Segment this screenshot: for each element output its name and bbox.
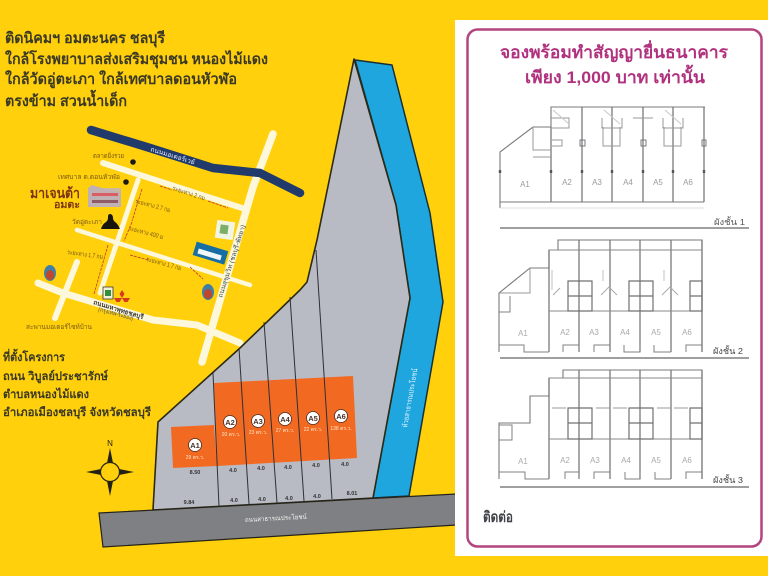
panel: project land: [153, 59, 410, 510]
lot markers: 27 ตร.ว.: [276, 428, 294, 434]
heading: location highlights: ใกล้วัดอู่ตะเภา ใกล้เทศบาลดอนหัวฬ่อ: [5, 70, 237, 89]
floor plan 3: A5: [651, 456, 661, 465]
lot dimensions: 4.0: [312, 463, 320, 469]
lot markers: A4: [280, 415, 291, 424]
floor plan 2: A2: [560, 328, 570, 337]
public road: [99, 494, 456, 547]
floor plan 2: A6: [682, 328, 692, 337]
panel: canal: [355, 60, 443, 498]
floor plan 1 label: ผังชั้น 1: [714, 216, 745, 227]
address text block: ที่ตั้งโครงการ: [3, 348, 66, 364]
map place labels: เทศบาล ต.ดอนหัวฬ่อ: [58, 173, 120, 181]
floor plan 1: A2: [562, 178, 572, 187]
floor plan 1: A1: [520, 180, 530, 189]
lot dimensions: 4.0: [257, 466, 265, 472]
floor plan 3: A1: [518, 457, 528, 466]
heading: location highlights: ใกล้โรงพยาบาลส่งเสริมชุมชน หนองไม้แดง: [5, 49, 268, 69]
floor plan 3: A3: [590, 456, 600, 465]
lot dimensions: 4.0: [229, 468, 237, 474]
panel border: [468, 30, 762, 546]
lot dimensions: 4.0: [313, 494, 321, 500]
map place labels: ระยะทาง 2 กม: [171, 185, 206, 202]
floor plan 2: A4: [620, 328, 630, 337]
lot markers: 23 ตร.ว.: [249, 430, 267, 436]
distance arrows: [94, 186, 228, 294]
lot markers: A5: [308, 414, 318, 423]
icon: blue shop sign: [193, 242, 228, 265]
canal label: ห้วยสาธารณประโยชน์: [400, 368, 419, 428]
logo: Magenta Amata: [30, 185, 80, 211]
floor plan 1: A3: [592, 178, 602, 187]
heading: location highlights: ตรงข้าม สวนน้ำเด็ก: [5, 89, 127, 110]
floor plan 3: A2: [560, 456, 570, 465]
highway label: ถนนมอเตอร์เวย์: [149, 145, 196, 166]
road label: ถนนสาธารณประโยชน์: [245, 513, 308, 524]
map place labels: ระยะทาง 2.7 กม: [134, 198, 171, 214]
lot dimensions: 9.84: [184, 500, 195, 506]
floor plan 2: A5: [651, 328, 661, 337]
logo: Magenta Amata: อมตะ: [54, 200, 80, 211]
address text block: ตำบลหนองไม้แดง: [3, 387, 89, 401]
heading: location highlights: [5, 29, 268, 110]
contact label: ติดต่อ: [483, 508, 513, 526]
lot markers: 20 ตร.ว.: [222, 432, 240, 438]
floor plan 1: A6: [683, 178, 693, 187]
floor plan 2: [499, 240, 702, 352]
lot dimensions: 8.50: [190, 470, 200, 476]
map place labels: ถนนมหาพุทธชลบุรี: [92, 298, 145, 321]
orange units A2 to A6: [214, 376, 357, 466]
location map: [26, 130, 300, 362]
lot dimensions: 4.0: [258, 497, 266, 503]
lot dimensions: 8.01: [347, 491, 357, 497]
lot markers: A2: [225, 418, 235, 427]
icon: Mitsubishi: [114, 290, 130, 302]
floor plan 2 label: ผังชั้น 2: [713, 345, 743, 356]
lot dimensions: 4.0: [341, 462, 349, 468]
icon: residence logo: [215, 220, 235, 240]
lot markers: 138 ตร.ว.: [330, 426, 352, 432]
floor plan 1: A5: [653, 178, 663, 187]
icon: temple left: [44, 265, 56, 281]
lot dimensions: 4.0: [284, 465, 292, 471]
lot markers: 22 ตร.ว.: [304, 427, 322, 433]
icon: building: [88, 185, 121, 207]
lot markers: A1: [190, 441, 200, 450]
panel: floor plans: [455, 20, 768, 556]
icon: compass: [86, 439, 134, 496]
logo: Magenta Amata: มาเจนต้า: [30, 185, 80, 201]
lot dimensions: [184, 462, 357, 506]
lot markers: 29 ตร.ว.: [186, 455, 204, 461]
floor plan 3 label: ผังชั้น 3: [713, 474, 743, 485]
floor plan 3: A6: [682, 456, 692, 465]
lot dimensions: 4.0: [285, 496, 293, 502]
icon: Buddha: [101, 214, 120, 229]
icon: temple right: [202, 284, 214, 300]
map place labels: ถนนสุขุมวิท (ชลบุรี-พัทยา): [216, 224, 247, 299]
white local roads: [38, 134, 273, 362]
white panel background: [455, 20, 768, 556]
floor plan 3: A4: [621, 456, 631, 465]
heading: location highlights: ติดนิคมฯ อมตะนคร ชลบุรี: [5, 29, 166, 48]
land parcel: [153, 59, 410, 510]
lot dimensions: 4.0: [230, 498, 238, 504]
highway road: [91, 130, 300, 193]
floor plan 1: [500, 107, 706, 208]
orange unit A1: [171, 425, 217, 468]
icon: market dots: [123, 159, 136, 185]
lot markers: A3: [253, 417, 263, 426]
heading: booking offer: [500, 40, 729, 87]
floor plan 2: A3: [589, 328, 599, 337]
address text block: อำเภอเมืองชลบุรี จังหวัดชลบุรี: [3, 405, 152, 420]
heading: booking offer: เพียง 1,000 บาท เท่านั้น: [525, 64, 705, 87]
map place labels: ตลาดยิ่งรวย: [93, 151, 124, 160]
floor plan 3: [499, 370, 702, 479]
map place labels: [26, 151, 247, 331]
address text block: [3, 348, 152, 420]
lot markers: A6: [336, 412, 346, 421]
lot markers: [186, 410, 352, 461]
floor plan 2: A1: [518, 329, 528, 338]
icon: 7-Eleven: [103, 287, 113, 299]
heading: booking offer: จองพร้อมทำสัญญายื่นธนาคาร: [500, 40, 729, 63]
floor plan 1: A4: [623, 178, 633, 187]
map place labels: ระยะทาง 400 ม: [127, 225, 164, 241]
map place labels: สะพานมอเตอร์ไซท์บ้าน: [26, 323, 93, 331]
icon: compass: N: [107, 439, 113, 448]
map place labels: (กรุงเทพ-ระยอง): [97, 306, 134, 322]
lot lines: [213, 250, 332, 506]
address text block: ถนน วิบูลย์ประชารักษ์: [3, 369, 108, 384]
map place labels: วัดอู่ตะเภา: [72, 218, 102, 226]
map place labels: ระยะทาง 1.7 กม: [145, 256, 182, 272]
map place labels: ระยะทาง 1.7 กม: [67, 249, 103, 261]
